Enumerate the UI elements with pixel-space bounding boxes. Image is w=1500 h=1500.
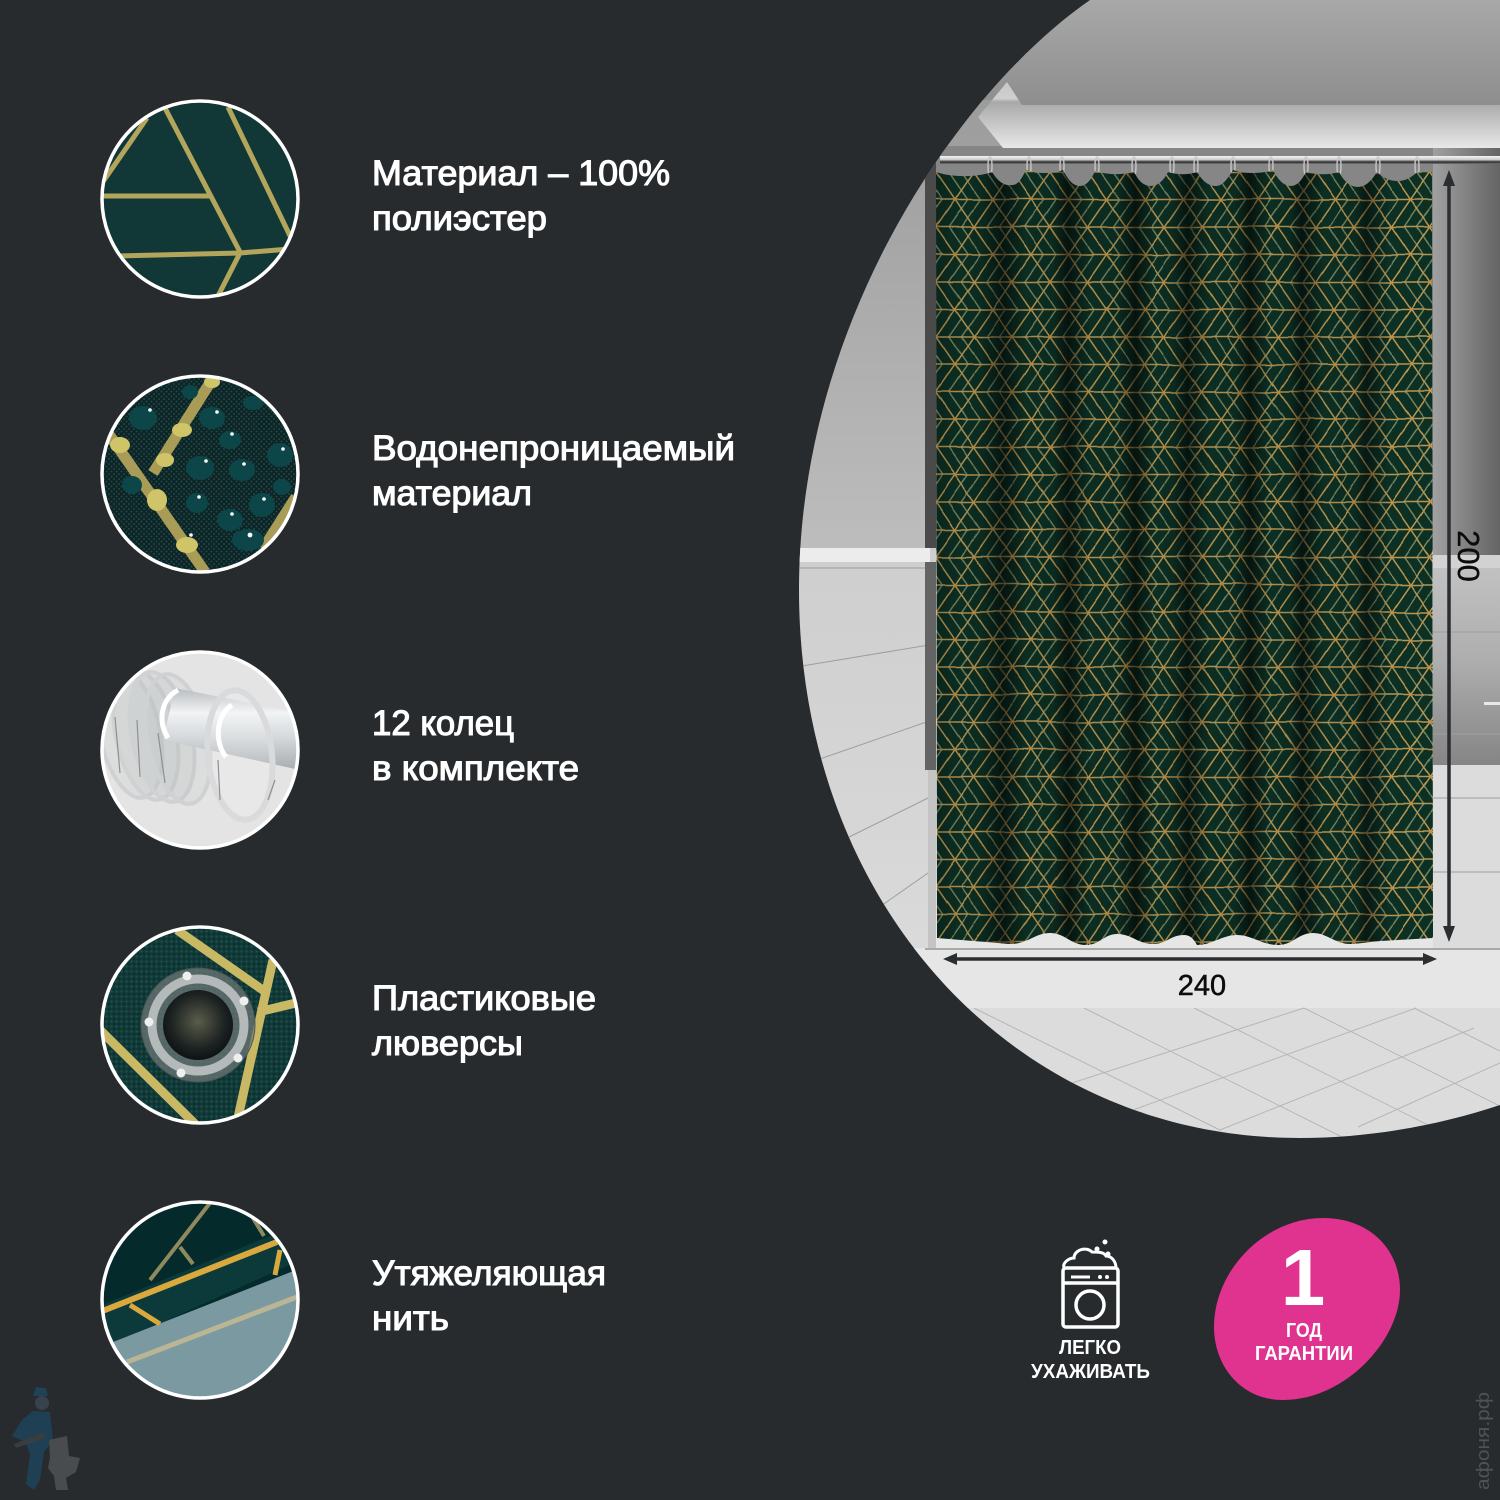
thumbnail: weighted hem bbox=[100, 1202, 300, 1400]
right wall bbox=[1433, 146, 1500, 556]
right wainscot tiles bbox=[1433, 555, 1500, 765]
badge: one year warranty: ГОД bbox=[1286, 1319, 1322, 1342]
text: easy care: УХАЖИВАТЬ bbox=[1031, 1360, 1150, 1383]
text: weighted thread: нить bbox=[372, 1299, 449, 1338]
text: waterproof: Водонепроницаемый bbox=[372, 429, 735, 468]
thumbnail: plastic grommet bbox=[100, 927, 300, 1124]
faucet bbox=[1484, 702, 1500, 705]
thumbnail: waterproof drops bbox=[102, 376, 298, 572]
back wall tiles behind curtain bbox=[936, 550, 1433, 950]
curtain rings bbox=[988, 157, 1419, 175]
text: grommets: Пластиковые bbox=[372, 979, 596, 1018]
watermark: site name: афоня.рф bbox=[1473, 1392, 1493, 1490]
label: width 240: 240 bbox=[1178, 970, 1226, 1002]
thumbnail: fabric material bbox=[100, 101, 298, 297]
curtain fabric bbox=[925, 160, 1445, 960]
cornice bbox=[978, 82, 1500, 148]
dark corner band bbox=[925, 146, 936, 548]
left wainscot tiles bbox=[790, 548, 936, 950]
arrow: height dimension bbox=[1443, 170, 1455, 942]
icon: plumber with toilet bbox=[12, 1387, 80, 1490]
left wall bbox=[790, 100, 1010, 550]
text: easy care: ЛЕГКО bbox=[1059, 1336, 1121, 1359]
text: material: полиэстер bbox=[372, 199, 547, 238]
wainscot top rail bbox=[790, 548, 930, 562]
badge: one year warranty: ГАРАНТИИ bbox=[1255, 1342, 1353, 1365]
floor bbox=[914, 948, 1500, 1138]
ceiling bbox=[978, 0, 1500, 106]
badge: one year warranty: 1 bbox=[1281, 1233, 1325, 1322]
text: weighted thread: Утяжеляющая bbox=[372, 1254, 606, 1293]
thumbnail: rings on rod bbox=[87, 652, 300, 848]
bathtub edge bbox=[928, 770, 936, 948]
text: material: Материал – 100% bbox=[372, 154, 670, 193]
back wall bbox=[926, 146, 1433, 550]
text: grommets: люверсы bbox=[372, 1024, 523, 1063]
arrow: width dimension bbox=[943, 953, 1437, 965]
text: waterproof: материал bbox=[372, 474, 532, 513]
label: height 200: 200 bbox=[1451, 530, 1486, 582]
panel: bathroom photo with curtain bbox=[790, 0, 1500, 1148]
text: rings: 12 колец bbox=[372, 704, 514, 743]
text: rings: в комплекте bbox=[372, 749, 579, 788]
icon: washing machine bbox=[1063, 1240, 1118, 1327]
corner band below rail bbox=[925, 562, 936, 770]
badge: one year warranty bbox=[1214, 1218, 1400, 1400]
curtain rod bbox=[940, 156, 1500, 164]
